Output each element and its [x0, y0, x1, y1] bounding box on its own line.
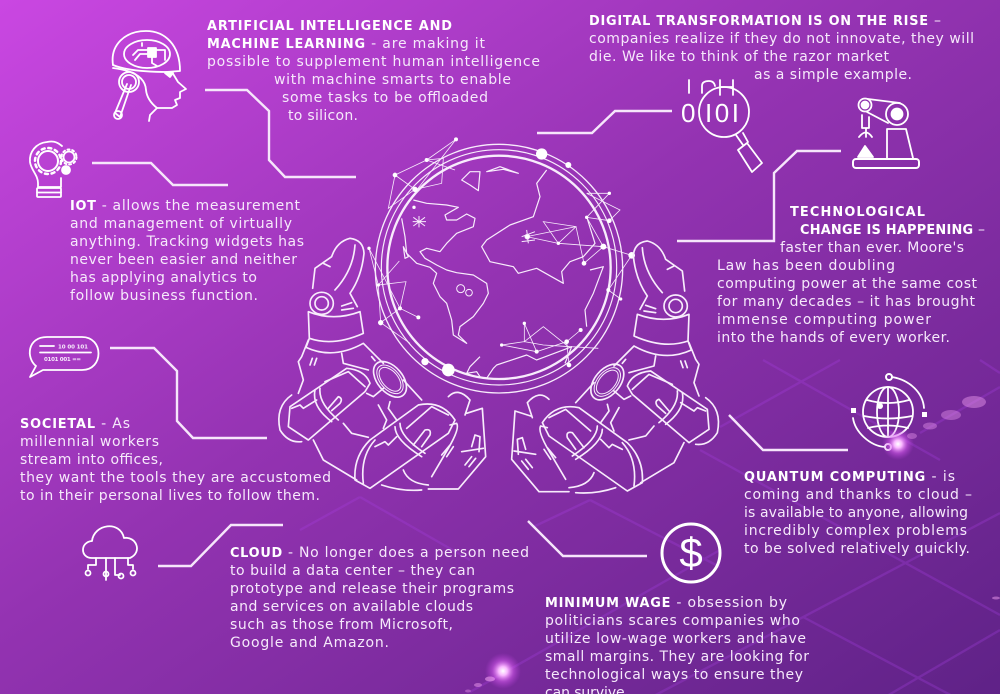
text: quantum computing: incredibly complex problems — [744, 523, 967, 539]
central illustration: globe held by robot hands — [279, 137, 718, 493]
text: IoT: IOT - allows the measurement — [70, 198, 300, 214]
text: technological change: computing power at the same cost — [717, 276, 978, 292]
network constellations — [369, 139, 632, 365]
text: technological change: CHANGE IS HAPPENING – — [800, 222, 985, 238]
right robot hand — [512, 241, 718, 493]
text: technological change: faster than ever. Moore's — [780, 240, 964, 256]
text: cloud: CLOUD - No longer does a person need — [230, 545, 529, 561]
text: cloud: prototype and release their programs — [230, 581, 514, 597]
text: quantum computing: to be solved relatively quickly. — [744, 541, 970, 557]
icon: cloud network — [83, 526, 137, 580]
left robot hand — [279, 238, 486, 490]
text: societal: they want the tools they are accustomed — [20, 470, 331, 486]
text: artificial intelligence: with machine smarts to enable — [274, 72, 511, 88]
text: societal: SOCIETAL - As — [20, 416, 130, 432]
text: IoT: has applying analytics to — [70, 270, 257, 286]
connector lines — [92, 90, 848, 566]
text: artificial intelligence: MACHINE LEARNING - are making it — [207, 36, 486, 52]
icon: binary under magnifying glass — [681, 80, 762, 172]
text: digital transformation: die. We like to think of the razor market — [589, 49, 890, 65]
icon: AI head — [113, 31, 186, 121]
text: minimum wage: MINIMUM WAGE - obsession by — [545, 595, 787, 611]
text: technological change: into the hands of every worker. — [717, 330, 950, 346]
text: technological change: Law has been doubling — [717, 258, 895, 274]
text: artificial intelligence: some tasks to be offloaded — [282, 90, 488, 106]
text: cloud: and services on available clouds — [230, 599, 473, 615]
text: artificial intelligence: ARTIFICIAL INTELLIGENCE AND — [207, 19, 452, 34]
text: societal: stream into offices, — [20, 452, 163, 468]
text: minimum wage: utilize low-wage workers and have — [545, 631, 806, 647]
text: quantum computing: coming and thanks to cloud – — [744, 487, 972, 503]
text: minimum wage: small margins. They are looking for — [545, 649, 809, 665]
text: IoT: and management of virtually — [70, 216, 292, 232]
text: minimum wage: technological ways to ensure they — [545, 667, 803, 683]
text: IoT: follow business function. — [70, 288, 258, 304]
text: artificial intelligence: possible to supplement human intelligence — [207, 54, 540, 70]
text: cloud — [230, 545, 529, 651]
text: societal: to in their personal lives to follow them. — [20, 488, 320, 504]
text: digital transformation: DIGITAL TRANSFORMATION IS ON THE RISE – — [589, 13, 941, 29]
text: technological change: TECHNOLOGICAL — [790, 205, 925, 220]
icon: speech bubble with binary: 10 00 101 — [58, 344, 88, 350]
icon: dollar coin: $ — [679, 529, 703, 576]
text: artificial intelligence — [207, 19, 540, 124]
text: societal: millennial workers — [20, 434, 159, 450]
icon: speech bubble with binary — [30, 337, 98, 377]
text: IoT — [70, 198, 304, 304]
icon: binary under magnifying glass: I0I — [705, 98, 739, 128]
text: cloud: Google and Amazon. — [230, 635, 389, 651]
text: quantum computing: is available to anyone, allowing — [744, 505, 968, 521]
lens flare trails — [465, 396, 1000, 692]
icon: dollar coin — [662, 524, 720, 582]
text: minimum wage: politicians scares companies who — [545, 613, 800, 629]
text: societal — [20, 416, 331, 504]
continents — [402, 167, 603, 378]
text: IoT: never been easier and neither — [70, 252, 297, 268]
globe rings — [375, 144, 623, 393]
text: cloud: such as those from Microsoft, — [230, 617, 453, 633]
icon: binary under magnifying glass: 0 — [681, 98, 695, 128]
icon: IoT light bulb with gears — [30, 141, 76, 197]
icon: robot arm — [853, 98, 919, 168]
text: quantum computing: QUANTUM COMPUTING - is — [744, 469, 955, 485]
text: technological change: for many decades – it has brought — [717, 294, 976, 310]
text: artificial intelligence: to silicon. — [288, 108, 358, 124]
text: digital transformation: companies realize if they do not innovate, they will — [589, 31, 974, 47]
text: technological change — [717, 205, 985, 346]
map symbols — [413, 216, 535, 296]
icon: speech bubble with binary: 0101 001 == — [44, 357, 81, 363]
text: cloud: to build a data center – they can — [230, 563, 475, 579]
text: IoT: anything. Tracking widgets has — [70, 234, 304, 250]
icon: quantum globe — [851, 374, 927, 450]
text: digital transformation — [589, 13, 974, 83]
text: quantum computing — [744, 469, 972, 557]
text: minimum wage — [545, 595, 809, 694]
network nodes — [367, 137, 635, 376]
text: digital transformation: as a simple example. — [754, 67, 912, 83]
text: technological change: immense computing power — [717, 312, 931, 328]
